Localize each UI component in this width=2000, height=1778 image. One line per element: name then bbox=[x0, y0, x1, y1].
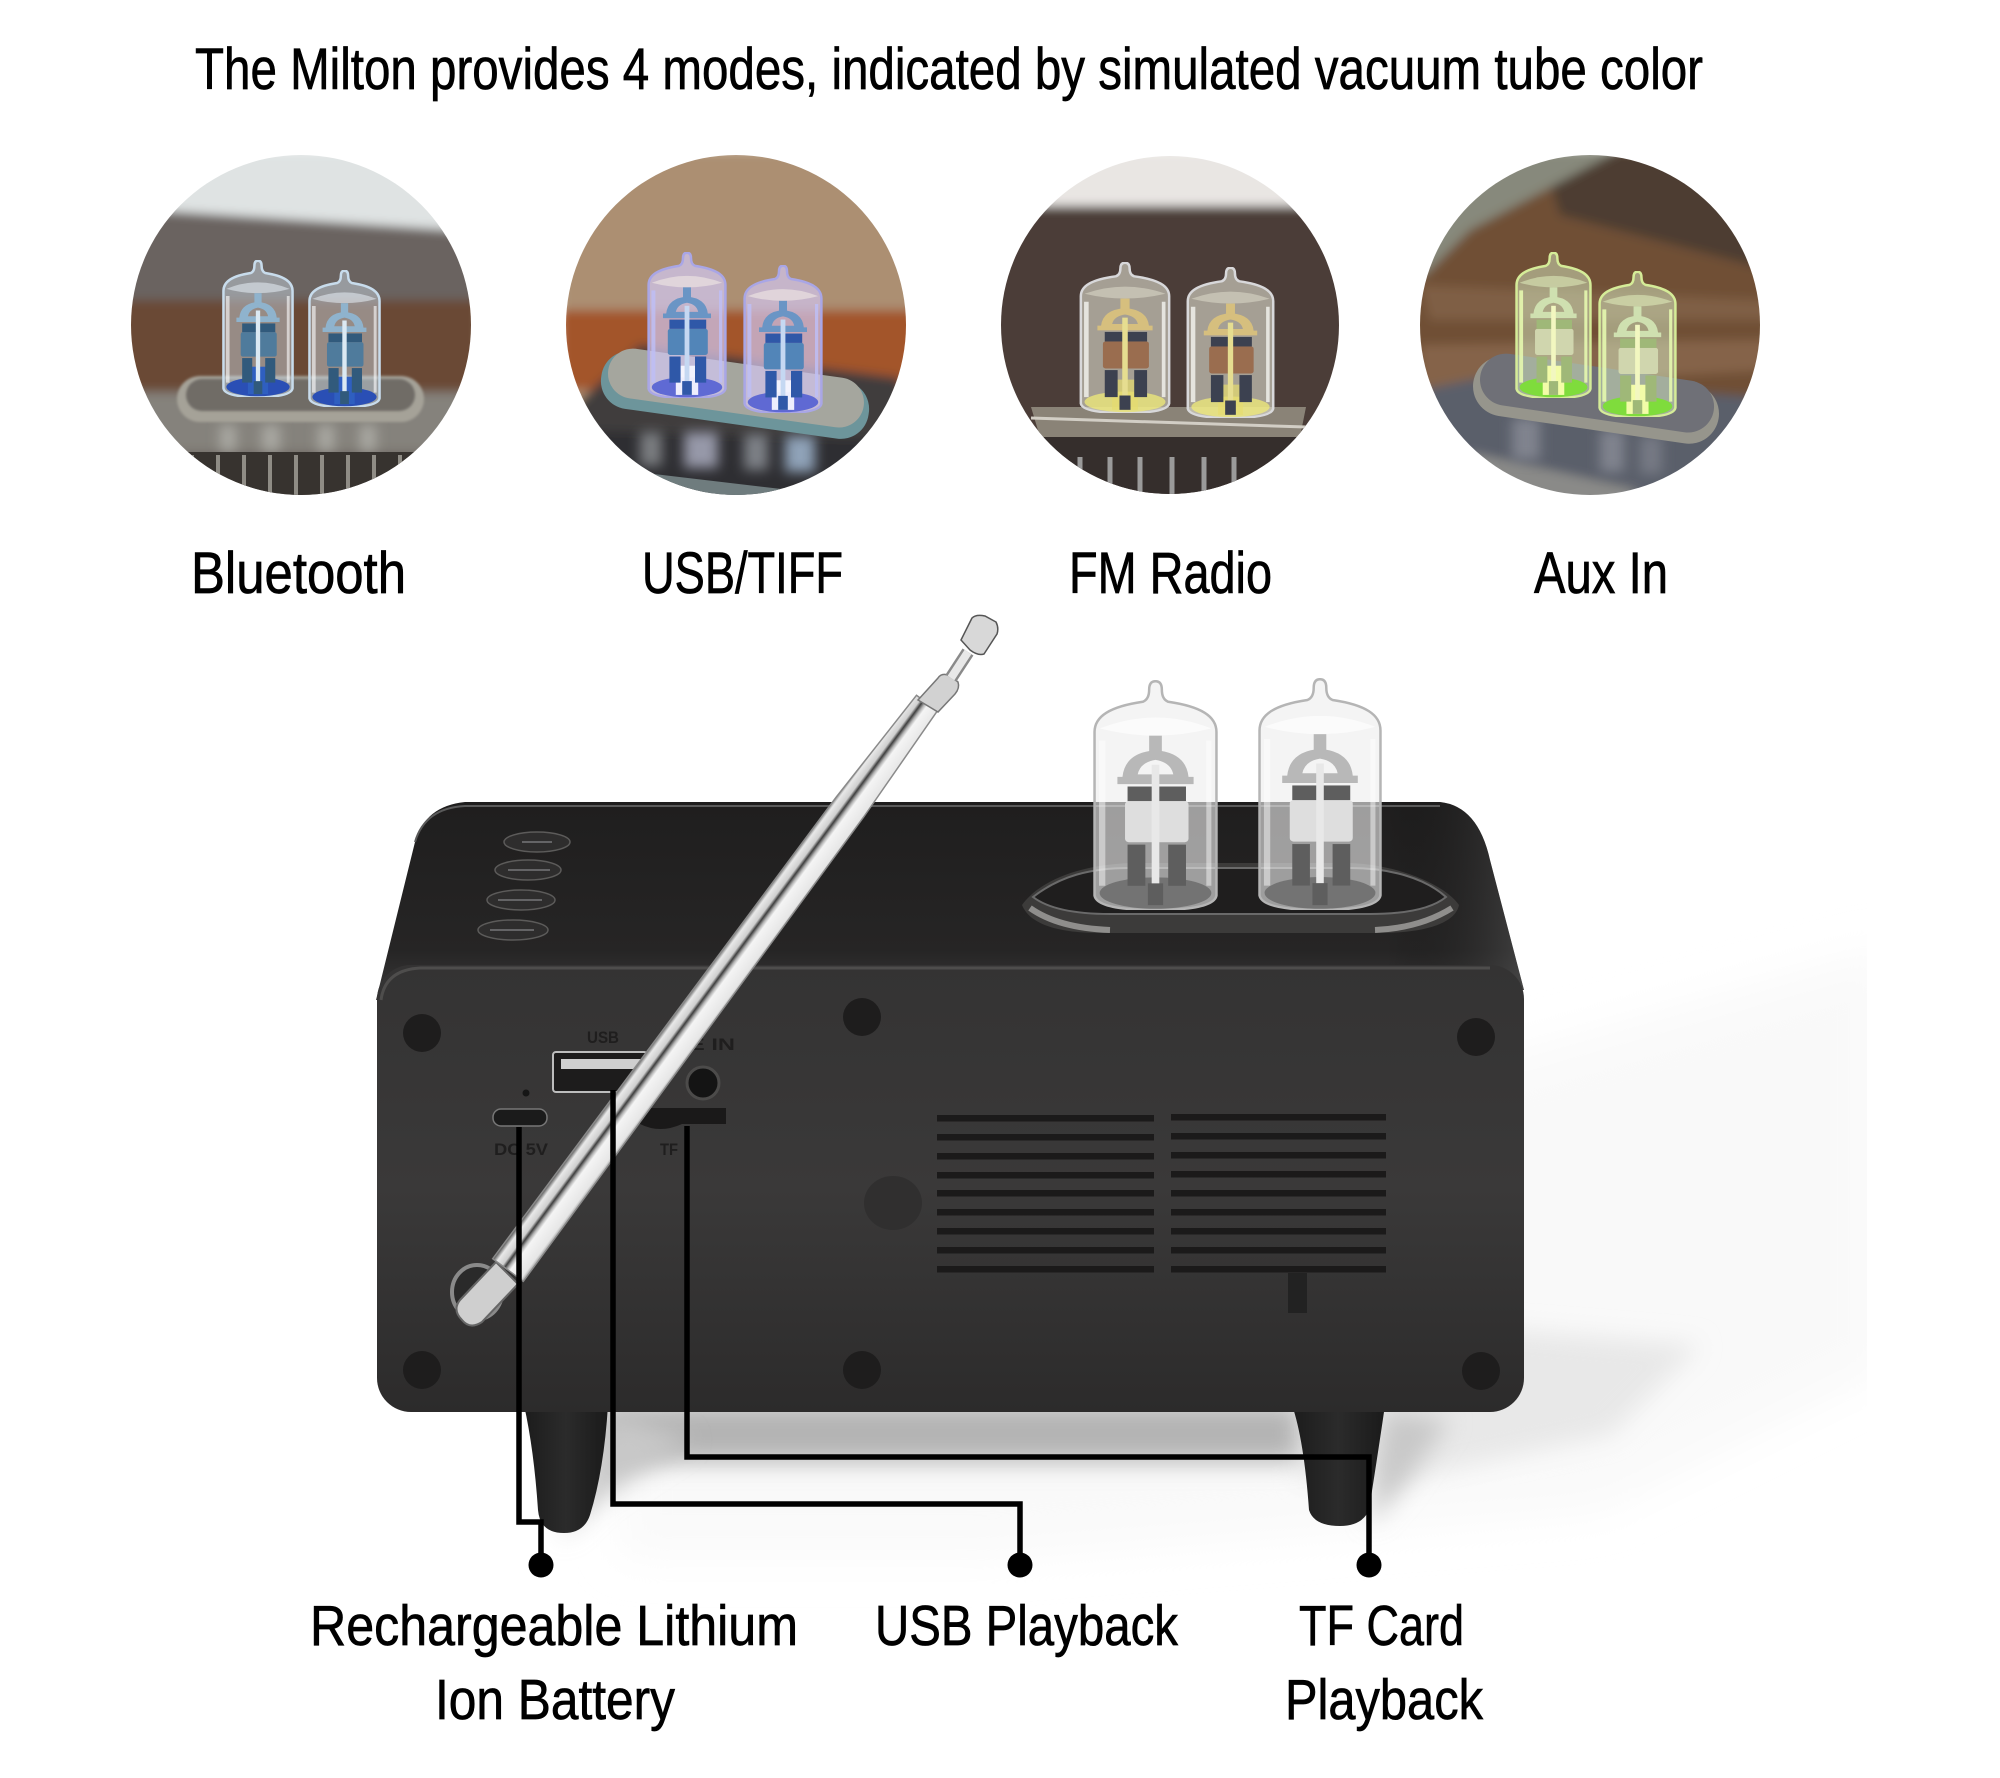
port labels: USB bbox=[587, 1028, 619, 1047]
right vacuum tube bbox=[1260, 679, 1380, 910]
left foot bbox=[524, 1405, 608, 1533]
telescopic antenna bbox=[452, 615, 998, 1326]
port labels bbox=[494, 1028, 735, 1159]
right foot bbox=[1292, 1405, 1385, 1526]
label: Bluetooth: Bluetooth bbox=[191, 541, 406, 606]
control buttons bbox=[478, 832, 570, 940]
callout dot: battery bbox=[528, 1552, 554, 1578]
TF slot bbox=[640, 1108, 726, 1129]
radio with antenna and tubes bbox=[376, 615, 1524, 1533]
port labels: E IN bbox=[689, 1035, 735, 1054]
screw holes bbox=[403, 998, 1500, 1390]
photo: USB/TIFF mode tubes bbox=[566, 155, 906, 495]
label: FM Radio: FM Radio bbox=[1069, 541, 1272, 606]
label: Rechargeable Lithium Ion Battery: Ion Battery bbox=[435, 1668, 675, 1732]
left vacuum tube bbox=[1095, 681, 1216, 910]
audio jack bbox=[687, 1067, 719, 1099]
label: USB Playback: USB Playback bbox=[875, 1594, 1178, 1658]
label: TF Card Playback bbox=[1285, 1594, 1483, 1732]
label: Rechargeable Lithium Ion Battery bbox=[310, 1594, 798, 1732]
callout dot: TF card bbox=[1356, 1552, 1382, 1578]
callout line: USB bbox=[613, 1090, 1020, 1565]
photo: Bluetooth mode tubes bbox=[120, 150, 480, 502]
photo: Aux In mode tubes bbox=[1420, 155, 1760, 495]
port labels: TF bbox=[660, 1140, 678, 1159]
slider switch bbox=[1288, 1273, 1307, 1313]
USB-C port bbox=[493, 1090, 547, 1126]
label: USB/TIFF: USB/TIFF bbox=[642, 541, 843, 606]
callout line: battery bbox=[519, 1127, 541, 1565]
centre button bbox=[864, 1176, 922, 1230]
label: TF Card Playback: TF Card bbox=[1299, 1594, 1464, 1658]
speaker vents bbox=[937, 1114, 1386, 1272]
title: The Milton provides 4 modes, indicated by simulated vacuum tube color bbox=[195, 37, 1703, 102]
label: Rechargeable Lithium Ion Battery: Rechargeable Lithium bbox=[310, 1594, 798, 1658]
label: Aux In: Aux In bbox=[1534, 541, 1668, 606]
USB port bbox=[553, 1052, 647, 1092]
ground shadow bbox=[567, 1318, 1702, 1534]
radio back panel bbox=[377, 965, 1524, 1412]
tube base plate bbox=[1022, 863, 1459, 933]
label: TF Card Playback: Playback bbox=[1285, 1668, 1483, 1732]
callout line: TF card bbox=[687, 1126, 1369, 1565]
photo: FM Radio mode tubes bbox=[990, 150, 1350, 502]
radio top face bbox=[376, 802, 1524, 1000]
port labels: DC 5V bbox=[494, 1140, 549, 1159]
callout dot: USB bbox=[1008, 1552, 1032, 1578]
